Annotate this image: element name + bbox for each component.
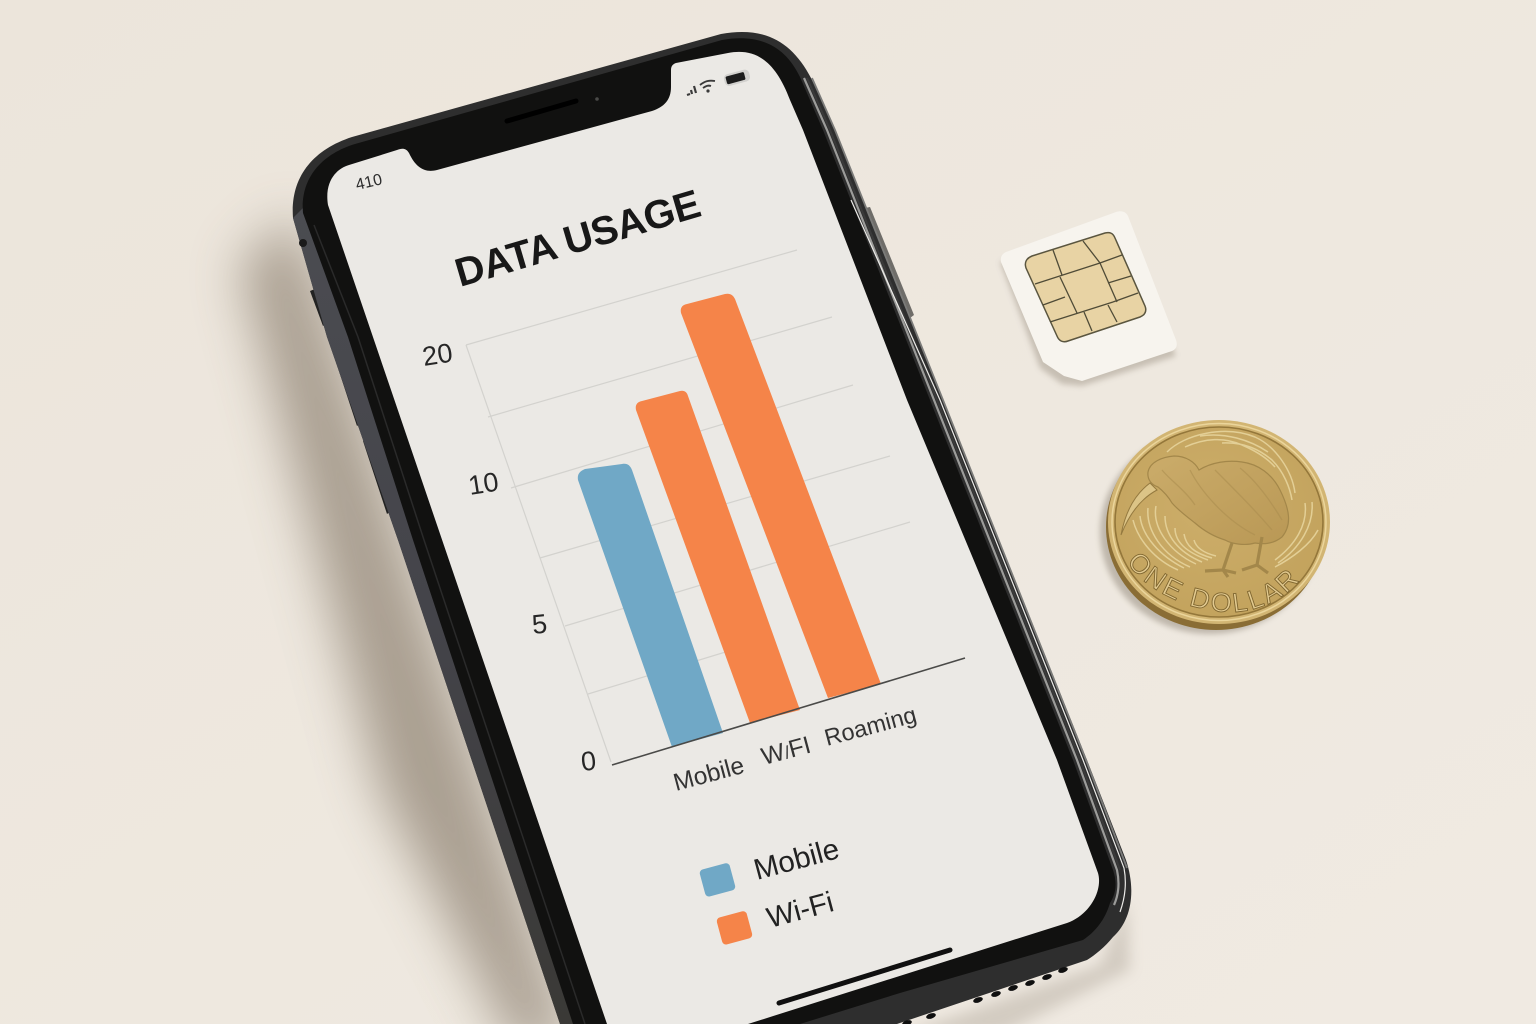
bar: mobile [578,464,723,747]
x axis [612,658,965,765]
legend swatch: wifi [716,910,753,945]
coin inner rim highlight [1112,424,1326,620]
black bezel [303,38,1116,1024]
SIM chip [1025,233,1146,342]
kiwi bird [1121,432,1318,577]
status bar: signal, wifi and battery icons [687,69,751,95]
kiwi bill [1121,483,1157,535]
phone body [293,32,1131,1024]
right metal edge highlights [804,78,1127,912]
phone shadow [240,215,575,1024]
fern fronds [1133,432,1318,570]
home indicator [779,950,950,1003]
bar chart [420,250,965,797]
left band camera hole [299,239,307,247]
notch speaker [507,101,576,121]
y axis labels [420,338,598,777]
coin rim [1108,420,1330,624]
legend swatch: mobile [699,862,736,897]
legend [699,832,843,945]
screen [327,52,1099,1024]
notch camera [595,97,599,101]
left metal band [293,205,585,1024]
status bar: clock: 410 [354,171,384,194]
phone [293,32,1131,1024]
x axis labels: Roaming [822,701,919,751]
bar: roaming [681,294,881,698]
legend label: mobile: Mobile [750,832,843,887]
SIM body [1001,211,1177,381]
kiwi feather shading [1162,468,1282,535]
gridlines [466,250,910,762]
bar: wifi [636,391,800,723]
one dollar coin [1097,420,1330,637]
coin inscription: ONE DOLLAR [1130,554,1300,613]
kiwi body [1148,456,1289,544]
y axis labels: 0 [579,746,598,777]
y axis labels: 5 [530,609,549,640]
kiwi legs [1205,537,1268,577]
y axis labels: 10 [466,467,501,501]
y axis labels: 20 [420,338,455,372]
side buttons [310,207,914,514]
coin edge [1106,424,1326,630]
x axis labels: Mobile [671,752,747,797]
legend label: wifi: Wi-Fi [764,886,837,935]
SIM shadow [1000,220,1176,386]
coin face [1115,427,1323,617]
SIM card [1000,211,1177,386]
x axis labels [671,701,919,797]
coin shadow [1100,430,1320,634]
chart title: DATA USAGE [450,182,705,296]
x axis labels: W/FI [759,732,814,771]
speaker grille dots [901,966,1069,1024]
left bezel inner line [314,225,585,1024]
